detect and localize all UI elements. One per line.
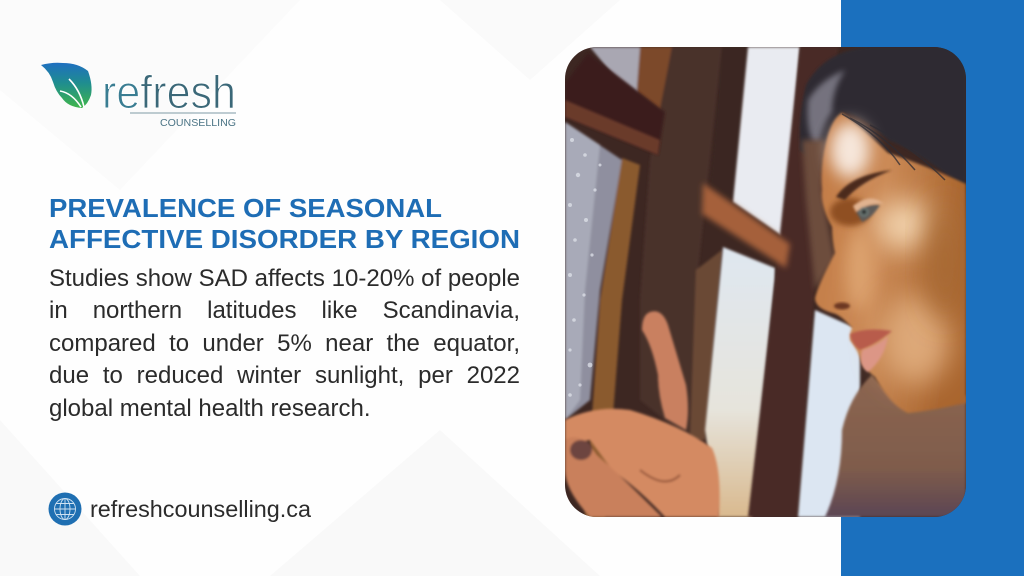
heading: PREVALENCE OF SEASONAL: [49, 193, 442, 223]
eye: [853, 198, 884, 222]
wordmark: refresh: [102, 66, 236, 118]
hair lower: [825, 375, 966, 517]
hand: [565, 311, 720, 517]
frost droplets: [568, 138, 602, 397]
logo rule: [130, 112, 236, 114]
hair upper: [800, 47, 966, 190]
icon: leaf: [41, 63, 92, 108]
blurred cross bar: [702, 183, 790, 268]
blue side panel: [841, 0, 1024, 576]
body text: Studies show SAD affects 10-20% of people: [49, 264, 520, 292]
nostril: [834, 302, 850, 310]
bright window panes: [733, 47, 800, 238]
face light and shade: [830, 122, 963, 385]
body text: compared to under 5% near the equator,: [49, 330, 520, 356]
eyebrow: [836, 170, 892, 200]
lips: [850, 330, 892, 350]
icon: globe: [48, 492, 82, 526]
website address: refreshcounselling.ca: [90, 496, 312, 522]
face: [815, 113, 966, 413]
body text: global mental health research.: [49, 394, 371, 422]
tagline: COUNSELLING: [160, 117, 236, 129]
window panes and frame: [565, 47, 722, 517]
hair wisps over forehead: [842, 114, 945, 180]
dark diagonal window beam: [566, 55, 666, 142]
body text: due to reduced winter sunlight, per 2022: [49, 362, 520, 389]
photo: woman looking out a window: [565, 47, 966, 517]
body text: in northern latitudes like Scandinavia,: [49, 297, 520, 324]
body text: [49, 264, 520, 422]
heading: AFFECTIVE DISORDER BY REGION: [49, 224, 520, 254]
